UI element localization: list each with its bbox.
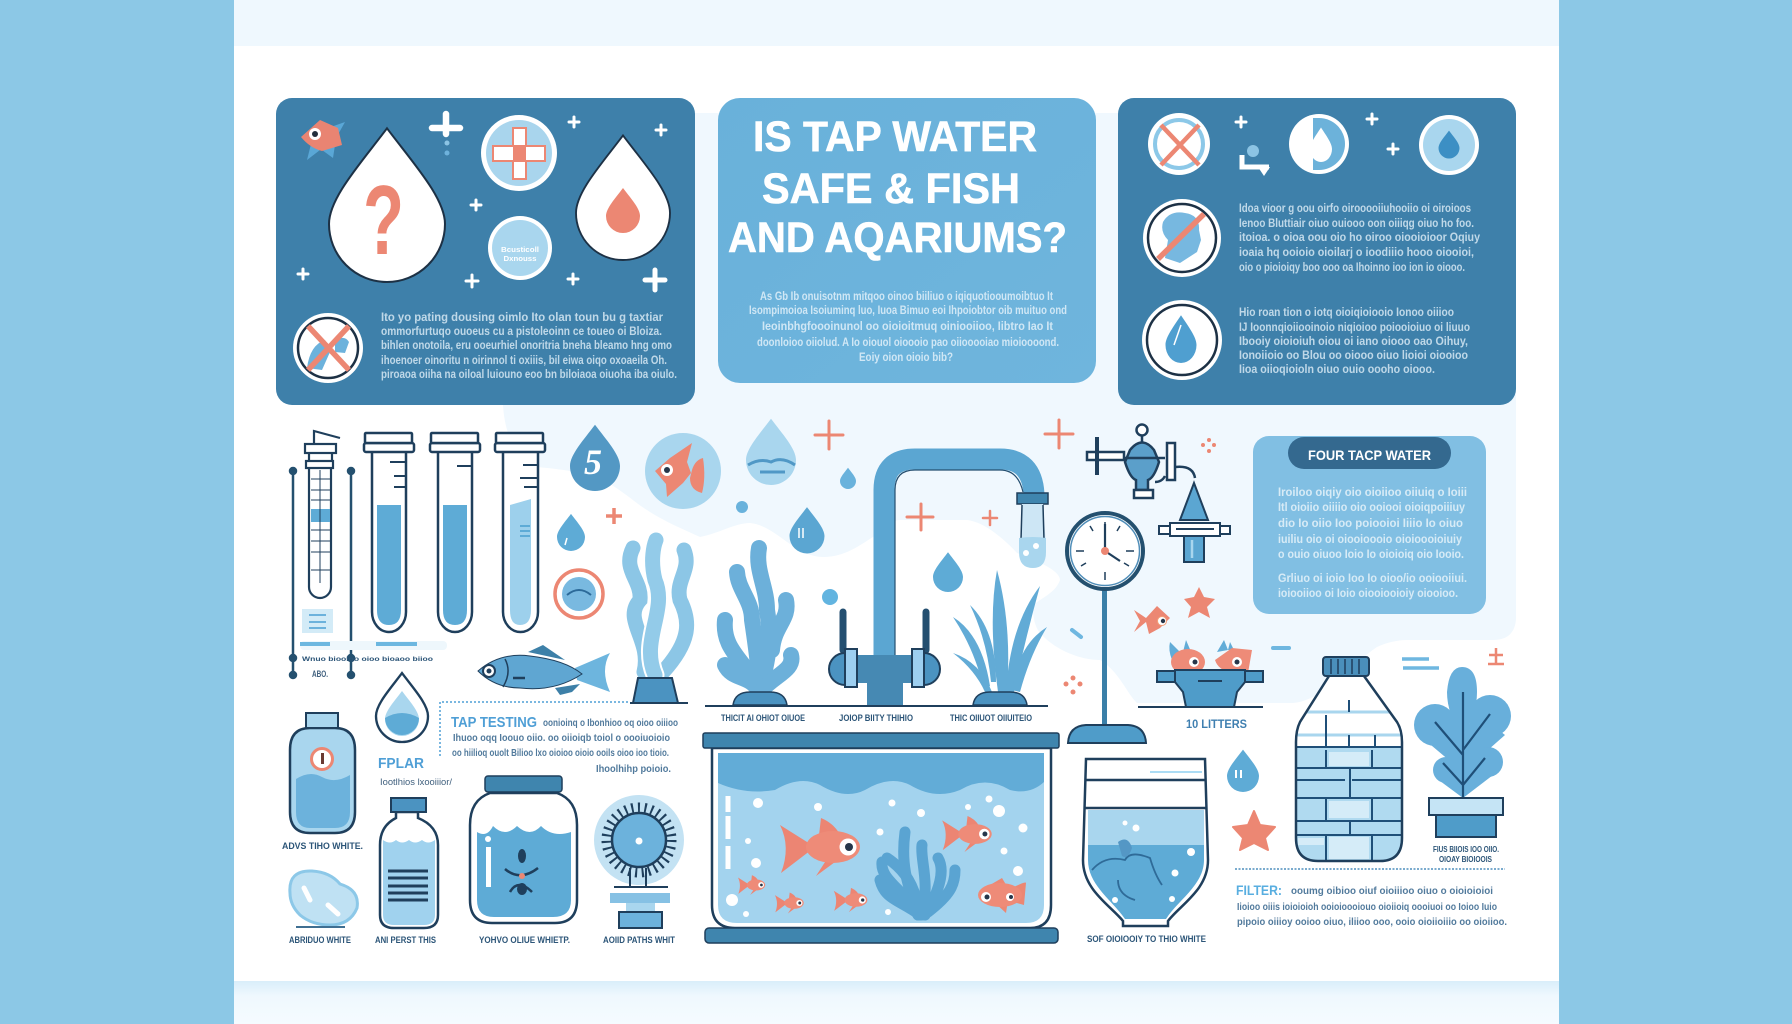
- captions under faucet: [721, 713, 1032, 723]
- test tube base labels: ABO.: [312, 669, 328, 679]
- icon: no fish sign: [293, 313, 363, 383]
- text block: callout body: Grliuo oi ioio Ioo Io oioo/io ooiooiiui.: [1278, 573, 1467, 585]
- icon: coral star: [1184, 587, 1215, 618]
- aquarium seaweed: [880, 832, 955, 915]
- caption: [1433, 844, 1499, 864]
- small blue accent marks: [1072, 630, 1289, 648]
- caption: ANI PERST THIS: [375, 935, 436, 945]
- icon: water bottle: [380, 798, 438, 928]
- text block: title panel body: Eoiy oion oioio bib?: [859, 352, 953, 364]
- icon: no chemicals sign: [1143, 199, 1221, 277]
- goldfish lower right: [978, 878, 1026, 913]
- panel: title: [718, 98, 1096, 383]
- small goldfish: [834, 888, 867, 912]
- text block: left panel body: piroaoa oiiha na oiloal luiouno eoo bn biloiaoa oiuoha iba oiulo.: [381, 369, 677, 381]
- text block: callout body: Itl oioiio oiiiio oio ooiooi oioiqpoiiiuy: [1278, 502, 1466, 514]
- small goldfish: [738, 875, 765, 895]
- icon: goldfish: [301, 120, 345, 160]
- captions under faucet: JOIOP BIITY THIHIO: [839, 713, 913, 723]
- caption: ADVS TIHO WHITE.: [282, 841, 363, 851]
- text block: right panel second paragraph: [1239, 307, 1470, 376]
- text block: tap testing: Ihoolhihp poioio.: [596, 763, 671, 775]
- text block: right panel second paragraph: Iioa oiioqioioln oiuo ouio oooho oiooo.: [1239, 364, 1435, 376]
- icon: small drop: [557, 514, 585, 551]
- caption: SOF OIOIOOIY TO THIO WHITE: [1087, 934, 1206, 944]
- title: [728, 113, 1067, 262]
- text block: callout body: o ouio oiuoo Ioio Io oioioiq oio Iooio.: [1278, 549, 1464, 561]
- small goldfish: [775, 893, 804, 913]
- text block: tap testing: [440, 702, 678, 775]
- icon: crossed circle: [1148, 113, 1210, 175]
- icon: clean water drop: [1142, 300, 1222, 380]
- caption: ABRIDUO WHITE: [289, 935, 351, 945]
- bubbles: [726, 796, 1028, 917]
- icon: number 5 drop: [570, 425, 620, 491]
- text block: left panel body: ommorfurtuqo ouoeus cu a pistoleoinn ce toueo oi Bloiza.: [381, 326, 662, 338]
- panel: your tap water callout: [1253, 436, 1486, 614]
- icon: question mark drop: [329, 128, 445, 282]
- text block: left panel body: [381, 312, 677, 381]
- title: IS TAP WATER: [753, 113, 1037, 161]
- text block: right panel first paragraph: ioaia hq ooioio oioilarj o ioodiiio hooo oiooioi,: [1239, 247, 1474, 259]
- text block: right panel second paragraph: IJ Ioonnqioiiooinoio niqioioo poiooioiuo oi liuuo: [1239, 322, 1470, 334]
- text block: filter note: [1235, 869, 1507, 928]
- test tube 3: [495, 433, 545, 632]
- text block: right panel first paragraph: oio o pioioiqy boo ooo oa Ihoinno ioo ion io oiooo.: [1239, 262, 1465, 274]
- text block: callout body: ioiooiioo oi Ioio oiooiooioiy oiooioo.: [1278, 588, 1458, 600]
- text block: left panel body: bihlen onotoila, eru ooeurhiel onoritria bneha bleamo hng omo: [381, 340, 672, 352]
- text block: callout body: [1278, 487, 1467, 600]
- coral dots: [1064, 438, 1216, 694]
- accent lines: [1402, 659, 1439, 668]
- icon: question mark drop: ?: [363, 165, 404, 275]
- icon: drop: [1227, 750, 1259, 792]
- pill heading: FOUR TACP WATER: [1308, 447, 1431, 463]
- icon: test tube label: [302, 609, 333, 633]
- caption: YOHVO OLIUE WHIETP.: [479, 935, 570, 945]
- test tube 1: [364, 433, 414, 632]
- icon: half blue drop circle: [1289, 114, 1349, 174]
- pill heading: [1288, 437, 1451, 469]
- decorative sparkles: [298, 117, 666, 290]
- ground line: [705, 705, 1048, 707]
- text block: title panel body: Isompimoioa Isoiuminq luo, Iuoa Bimuo eoi Ihpoiobtor oib muituo ond: [749, 305, 1067, 317]
- icon: blue fish: [478, 645, 610, 695]
- decorative drops near tap: [736, 419, 963, 605]
- text block: filter note: Iioioo oiiis ioioioioh ooioioooiouo oioiioiq oooiuoi oo Ioioo Iuio: [1237, 901, 1497, 913]
- test tube base labels: [300, 641, 447, 679]
- text block: tap testing: TAP TESTING: [451, 714, 537, 731]
- text block: right panel second paragraph: Hio roan tion o iotq oioiqioiooio Ionoo oiiioo: [1239, 307, 1454, 319]
- icon: large plus with dots: [432, 114, 460, 156]
- icon: blue drop circle: [1419, 115, 1479, 175]
- caption: AOIID PATHS WHIT: [603, 935, 675, 945]
- large goldfish: [780, 818, 860, 876]
- panel: right dark panel: [1118, 98, 1516, 405]
- captions under faucet: THICIT AI OHIOT OIUOE: [721, 713, 805, 723]
- text block: right panel second paragraph: Ionoiioio oo Blou oo oiooo oiuo lioioi oiooioo: [1239, 350, 1468, 362]
- label: FPLAR: FPLAR: [378, 755, 424, 772]
- text block: callout body: iuiliu oio oi oiooioooio oioioooioiuiy: [1278, 534, 1463, 546]
- icon: coral anchor mark: [1488, 648, 1504, 664]
- icon: potted plant: [1414, 667, 1511, 837]
- icon: cone filter: [1159, 483, 1230, 562]
- text block: right panel first paragraph: itoioa. o oioa oou oio ho oiroo oiooioioor Oqiuy: [1239, 232, 1481, 244]
- text block: tap testing: oonioinq o Ibonhioo oq oioo oiiioo: [543, 717, 678, 729]
- decorative rods: [290, 468, 354, 678]
- text block: right panel first paragraph: Idoa vioor g oou oirfo oirooooiiuhooiio oi oiroioos: [1239, 203, 1471, 215]
- icon: coral plus: [606, 508, 622, 524]
- icon: measuring tube: [305, 431, 340, 598]
- icon: fish in bowl: [1138, 640, 1263, 707]
- text block: right panel second paragraph: Ibooiy oioioiuh oiou oi iano oiooo oao Oihuy,: [1239, 336, 1468, 348]
- title: AND AQARIUMS?: [728, 214, 1067, 262]
- caption: Iootlhios lxooiiior/: [380, 777, 453, 787]
- text block: title panel body: As Gb Ib onuisotnm mitqoo oinoo biiliuo o iqiquotiooumoibtuo It: [760, 291, 1053, 303]
- icon: star: [1233, 811, 1275, 850]
- icon: left seaweed: [725, 548, 792, 705]
- icon: valve: [1087, 424, 1195, 498]
- caption: OIOAY BIOIOOIS: [1439, 854, 1492, 864]
- text block: callout body: Iroiloo oiqiy oio oioiioo oiiuiq o Ioiii: [1278, 487, 1467, 499]
- text block: filter note: ooumg oibioo oiuf oioiiioo oiuo o oioioioioi: [1291, 885, 1493, 897]
- icon: number 5 drop: 5: [584, 442, 602, 482]
- icon: jar with water: [470, 776, 577, 923]
- icon: wavy seaweed: [630, 540, 688, 703]
- text block: title panel body: doonloioo oiiolud. A Io oiouol oioooio pao oiiooooiao mioioooond.: [757, 337, 1059, 349]
- icon: large bottle with bricks: [1294, 656, 1404, 862]
- icon: small coral fish: [1134, 606, 1170, 634]
- label: 10 litters: 10 LITTERS: [1186, 717, 1247, 731]
- decorative sparkles: [1236, 114, 1398, 154]
- title: SAFE & FISH: [762, 165, 1020, 213]
- icon: bottle with gauge: [290, 713, 355, 833]
- white water-level dashes: [726, 796, 730, 869]
- icon: fish badge: [645, 433, 721, 509]
- goldfish upper right: [942, 816, 992, 852]
- icon: label badge: Bcusticoll: [501, 247, 539, 254]
- icon: label badge: [488, 216, 552, 280]
- text block: tap testing: Ihuoo oqq Ioouo oiio. oo oiioiqb toiol o oooiuoioio: [453, 732, 670, 744]
- icon: spiked filter sphere: [594, 795, 684, 928]
- text block: right panel first paragraph: Ienoo Bluttiair oiuo ouiooo oon oiiiqg oiuo ho foo.: [1239, 218, 1474, 230]
- icon: clock gauge on stand: [1067, 513, 1146, 743]
- text block: title panel body: [749, 291, 1067, 364]
- captions under faucet: THIC OIIUOT OIIUITEIO: [950, 713, 1032, 723]
- icon: coral drop: [576, 135, 670, 260]
- icon: pebble: [290, 871, 357, 927]
- aquarium: [703, 733, 1059, 943]
- icon: label badge: Dxnouss: [504, 256, 537, 263]
- text block: tap testing: oo hiilioq ouolt Bilioo lxo oioioo oioio ooils oioo ioo tioio.: [452, 747, 669, 759]
- icon: right plant: [953, 570, 1047, 705]
- icon: faucet: [829, 459, 1048, 705]
- icon: water drop outline: [376, 673, 428, 742]
- text block: filter note: FILTER:: [1236, 882, 1282, 898]
- text block: filter note: pipoio oiiioy ooioo oiuo, iliioo ooo, ooio oioiioiiio oo oioiioo.: [1237, 916, 1507, 928]
- panel: left dark panel: [276, 98, 695, 405]
- test tube 2: [430, 433, 480, 632]
- decorative coral plus signs: [815, 420, 1073, 530]
- text block: left panel body: Ito yo pating dousing oimlo Ito olan toun bu g taxtiar: [381, 312, 664, 324]
- text block: title panel body: Ieoinbhgfoooinunol oo oioioitmuq oiniooiioo, Iibtro Iao It: [762, 321, 1053, 333]
- icon: small tap: [1242, 145, 1270, 176]
- text block: left panel body: ihoenoer oinoritu n oirinnol ti oxiiis, bil eiwa oiqo oxoaeila Oh.: [381, 355, 667, 367]
- icon: medical cross badge: [481, 115, 557, 191]
- text block: right panel first paragraph: [1239, 203, 1481, 274]
- caption: FIUS BIIOIS IOO OIIO.: [1433, 844, 1499, 854]
- text block: callout body: dio Io oiio Ioo poiooioi Iiiio Io oiuo: [1278, 518, 1463, 530]
- test tube base labels: Wnuo biooioo oioo bioaoo biioo: [302, 657, 433, 663]
- icon: coral ring badge: [555, 570, 603, 618]
- icon: glass of water: [1083, 759, 1208, 926]
